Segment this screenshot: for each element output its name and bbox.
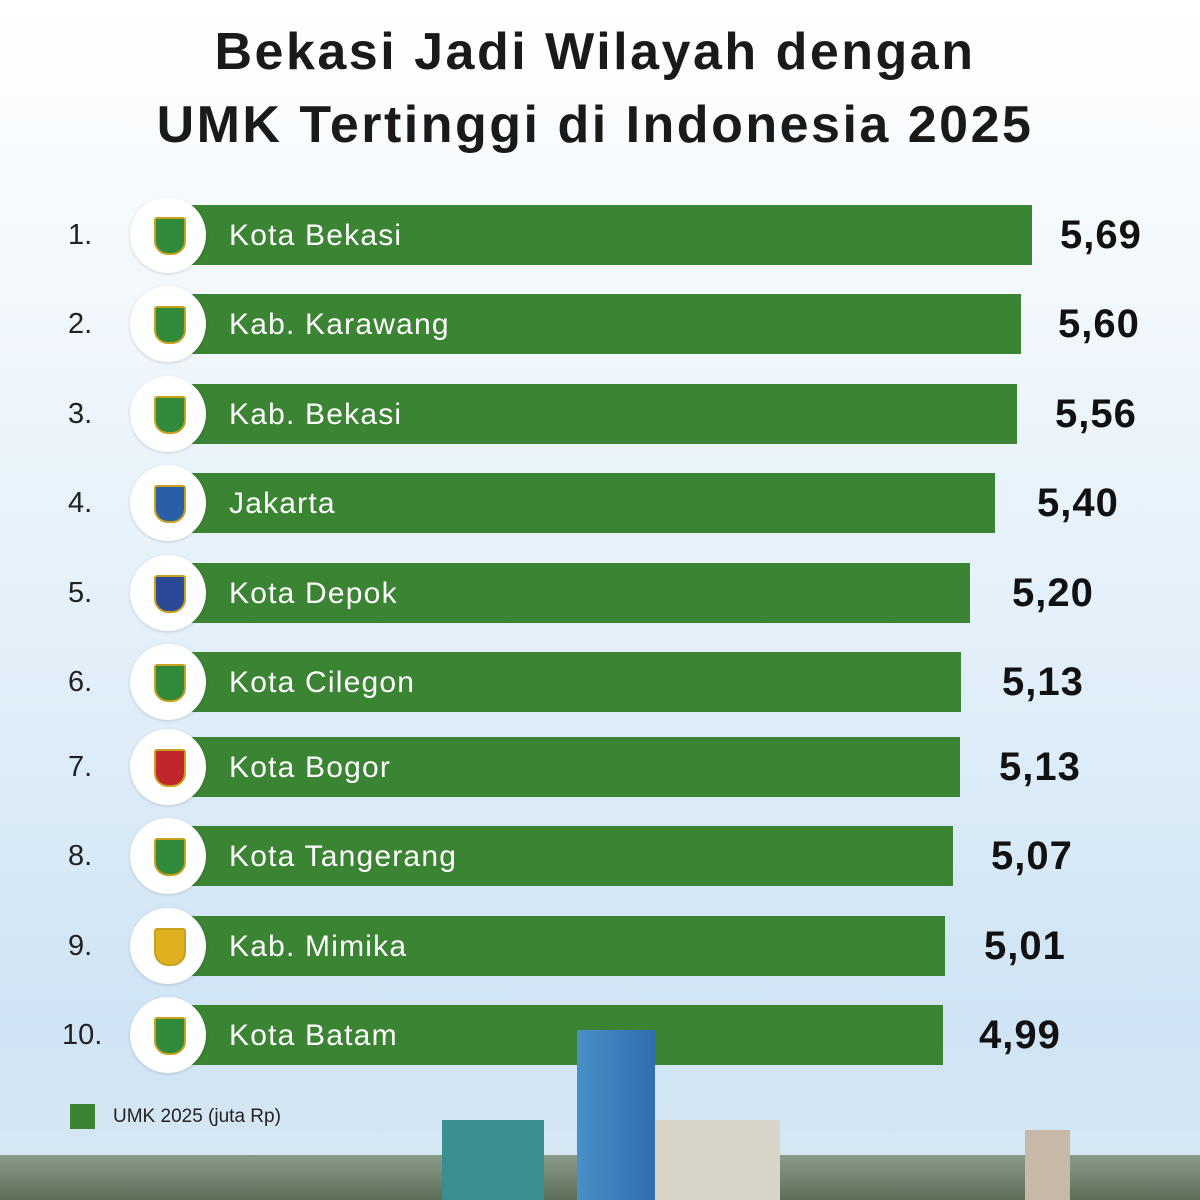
row 6: Kota Cilegon: [229, 666, 415, 699]
row 9: 5,01: [984, 924, 1066, 968]
row 10: 4,99: [979, 1013, 1061, 1057]
row 2: [68, 286, 1140, 364]
row 3: 5,56: [1055, 392, 1137, 436]
row 5: [68, 555, 1094, 633]
row 9: 9.: [68, 930, 92, 962]
row 1: 5,69: [1060, 213, 1142, 257]
row 1: [68, 197, 1142, 275]
row 6: 6.: [68, 666, 92, 698]
row 7: 7.: [68, 751, 92, 783]
row 1: 1.: [68, 219, 92, 251]
row 1: Kota Bekasi: [229, 219, 402, 252]
row 2: 2.: [68, 308, 92, 340]
row 3: Kab. Bekasi: [229, 398, 402, 431]
row 7: 5,13: [999, 745, 1081, 789]
row 7: Kota Bogor: [229, 751, 391, 784]
legend: UMK 2025 (juta Rp): [113, 1106, 281, 1127]
tower: [577, 1030, 655, 1200]
row 4: 4.: [68, 487, 92, 519]
row 5: 5,20: [1012, 571, 1094, 615]
row 6: [68, 644, 1084, 722]
row 10: 10.: [62, 1019, 102, 1051]
row 8: Kota Tangerang: [229, 840, 457, 873]
row 6: 5,13: [1002, 660, 1084, 704]
row 4: 5,40: [1037, 481, 1119, 525]
row 9: Kab. Mimika: [229, 930, 407, 963]
row 4: Jakarta: [229, 487, 336, 520]
row 3: 3.: [68, 398, 92, 430]
skyline: [0, 1155, 1200, 1200]
title: Bekasi Jadi Wilayah dengan: [214, 23, 976, 81]
row 3: [68, 376, 1137, 454]
row 10: Kota Batam: [229, 1019, 398, 1052]
row 8: [68, 818, 1073, 896]
row 9: [68, 908, 1066, 986]
legend: [70, 1104, 281, 1129]
row 2: 5,60: [1058, 302, 1140, 346]
row 4: [68, 465, 1119, 543]
row 7: [68, 729, 1081, 807]
subtitle: UMK Tertinggi di Indonesia 2025: [157, 96, 1033, 154]
buildings: [442, 1120, 544, 1200]
row 2: Kab. Karawang: [229, 308, 450, 341]
row 10: [62, 997, 1061, 1075]
row 8: 5,07: [991, 834, 1073, 878]
row 8: 8.: [68, 840, 92, 872]
row 5: Kota Depok: [229, 577, 398, 610]
row 5: 5.: [68, 577, 92, 609]
